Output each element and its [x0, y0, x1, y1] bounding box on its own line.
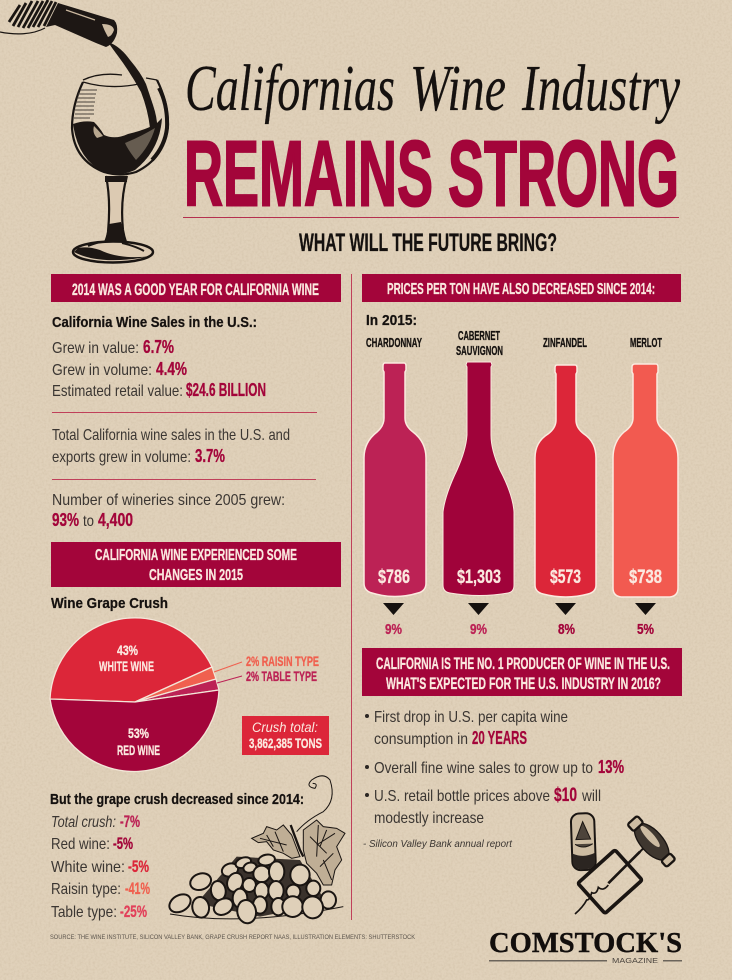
source line: SOURCE: THE WINE INSTITUTE, SILICON VALLEY BANK, GRAPE CRUSH REPORT NAAS, ILLUSTRATION ELEMENTS: SHUTTERSTOCK [50, 934, 416, 941]
stat list: crush changes: -5% [113, 835, 133, 853]
bottle: merlot: $738 [629, 567, 662, 588]
slice: red wine 53% [50, 690, 219, 771]
stat: wineries: Number of wineries since 2005 grew: [52, 492, 285, 509]
stat list: crush changes: -7% [120, 813, 140, 831]
heading bar [51, 542, 341, 587]
title [184, 52, 681, 226]
pie label: white wine: WHITE WINE [99, 658, 154, 674]
bullet: per capita: 20 YEARS [472, 728, 527, 748]
panel: 2015 changes [50, 542, 341, 921]
callout: table type: 2% TABLE TYPE [246, 668, 317, 684]
bottle: chardonnay [364, 336, 426, 638]
stat list: crush changes: White wine: [51, 859, 125, 876]
bottle: zinfandel: $573 [550, 567, 581, 588]
stat: volume: 4.4% [156, 359, 187, 379]
bottle: chardonnay: $786 [378, 567, 410, 588]
callout: crush total [242, 716, 329, 755]
slice: table 2% [135, 679, 219, 702]
bottle: zinfandel: 8% [558, 621, 575, 638]
stat: wineries: 93% [52, 510, 79, 530]
stat: value: 6.7% [143, 337, 174, 357]
bullet: fine wine sales: Overall fine wine sales to grow up to [374, 760, 593, 777]
stat: wineries: 4,400 [98, 510, 133, 530]
attribution: - Silicon Valley Bank annual report [363, 838, 513, 850]
bullet: bottle prices: U.S. retail bottle prices above [374, 788, 550, 805]
stat: wineries: to [83, 513, 94, 530]
title: script line: Wine [410, 52, 506, 125]
panel: 2014 good year [51, 274, 341, 530]
pie label: red wine: RED WINE [117, 742, 160, 758]
bullet: fine wine sales: 13% [598, 757, 624, 777]
subheading: grape crush: Wine Grape Crush [51, 596, 168, 612]
subtitle: WHAT WILL THE FUTURE BRING? [299, 229, 557, 257]
heading bar [51, 274, 341, 302]
pie label: red wine: 53% [128, 725, 149, 741]
callout: raisin type: 2% RAISIN TYPE [246, 653, 319, 669]
panel: prices per ton [362, 274, 681, 638]
bottle: cabernet sauvignon: CABERNET [458, 329, 500, 343]
illustration: grapes [166, 776, 345, 925]
slice: white wine 43% [50, 618, 212, 702]
heading bar [362, 274, 681, 302]
stat list: crush changes: Table type: [51, 904, 117, 921]
stat: value: Grew in value: [52, 340, 139, 357]
bottle: zinfandel [535, 336, 596, 638]
bottle: cabernet sauvignon: SAUVIGNON [456, 344, 503, 358]
bottle: merlot [613, 336, 678, 638]
panel: 2016 outlook [362, 648, 682, 850]
stat list: crush changes: -41% [125, 880, 150, 898]
illustration: bottle pouring wine into glass [0, 0, 168, 262]
stat: retail value: $24.6 BILLION [186, 380, 266, 400]
bullet: bottle prices: modestly increase [374, 810, 484, 827]
bottle: merlot: MERLOT [630, 336, 662, 350]
illustration: cork and corkscrew [571, 813, 679, 914]
bullet: bottle prices: $10 [554, 785, 577, 806]
pie label: white wine [99, 642, 154, 674]
stat list: crush changes: Total crush: [51, 814, 116, 831]
stat list: crush changes: Red wine: [51, 836, 110, 853]
bullet: bottle prices [365, 785, 601, 827]
bottle: zinfandel: ZINFANDEL [543, 336, 587, 350]
stat: volume: Grew in volume: [52, 362, 152, 379]
heading bar: 2014 WAS A GOOD YEAR FOR CALIFORNIA WINE [72, 281, 319, 299]
bottle: chardonnay: CHARDONNAY [366, 336, 422, 350]
stat list: crush changes [51, 813, 150, 921]
stat: retail value: Estimated retail value: [52, 383, 183, 400]
stat list: crush changes: Raisin type: [51, 881, 121, 898]
subheading: in 2015: In 2015: [366, 313, 417, 329]
slice: raisin 2% [135, 667, 216, 702]
stat list: crush changes: -25% [120, 903, 147, 921]
stat: wineries [52, 492, 285, 530]
bullet: per capita: consumption in [374, 731, 468, 748]
callout: crush total: Crush total: [252, 720, 318, 735]
pie label: white wine: 43% [117, 642, 138, 658]
heading bar [362, 648, 682, 696]
logo: Comstock's Magazine: MAGAZINE [612, 956, 658, 965]
subheading: crush decrease: But the grape crush decreased since 2014: [50, 792, 304, 808]
logo: Comstock's Magazine: COMSTOCK'S [489, 927, 682, 959]
callout: raisin type [214, 653, 319, 672]
heading bar: CHANGES IN 2015 [149, 567, 243, 584]
bottle: chardonnay: 9% [385, 621, 402, 638]
bullet: bottle prices: will [581, 788, 601, 805]
bottle: cabernet sauvignon [443, 329, 514, 638]
bottle: merlot: 5% [637, 621, 654, 638]
callout: crush total: 3,862,385 TONS [249, 736, 322, 751]
stat: total sales: exports grew in volume: [52, 449, 191, 466]
stat: total sales [52, 427, 290, 466]
title: script line: Californias [185, 52, 395, 125]
heading bar: CALIFORNIA WINE EXPERIENCED SOME [95, 547, 297, 564]
stat: total sales: 3.7% [195, 446, 225, 466]
stat: retail value [52, 380, 266, 400]
bullet: per capita [365, 709, 568, 748]
bullet: per capita: First drop in U.S. per capita wine [374, 709, 568, 726]
pie chart [50, 618, 219, 771]
bottle: cabernet sauvignon: 9% [470, 621, 487, 638]
callout: table type [217, 668, 317, 684]
pie label: red wine [117, 725, 160, 758]
bottle: cabernet sauvignon: $1,303 [457, 567, 501, 588]
stat list: crush changes: -5% [128, 858, 149, 876]
stat: total sales: Total California wine sales in the U.S. and [52, 427, 290, 444]
subheading: wine sales: California Wine Sales in the U.S.: [52, 315, 257, 331]
